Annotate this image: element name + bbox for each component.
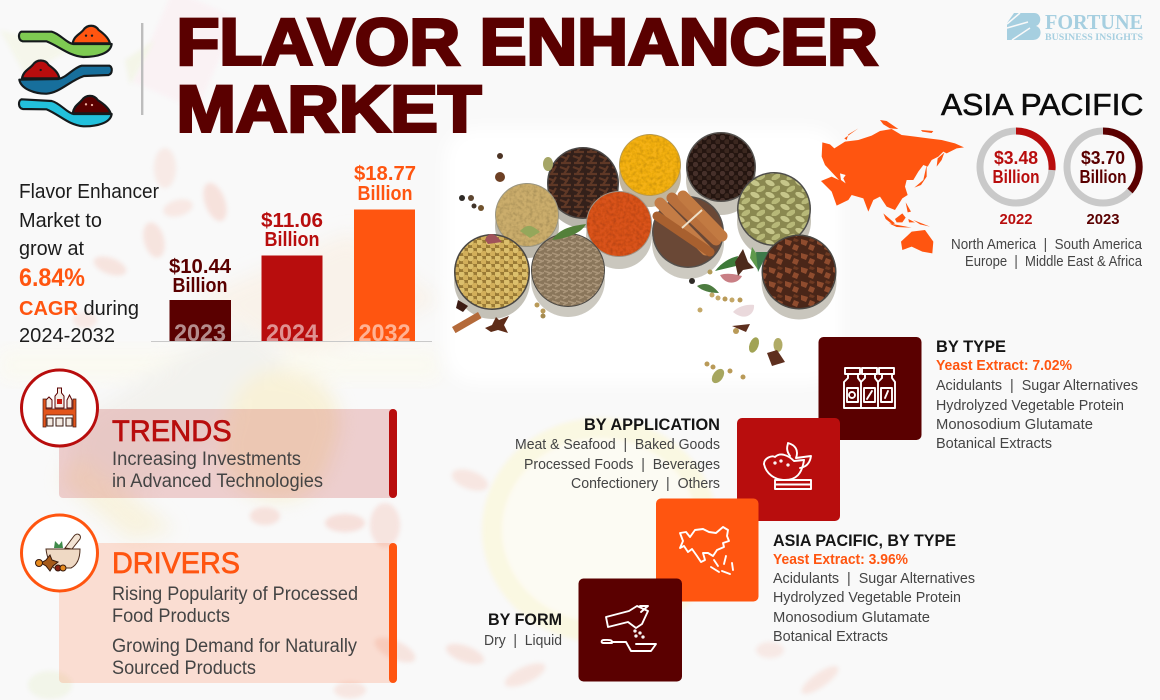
- text: market growth statement: Market to: [19, 210, 102, 232]
- text: Asia Pacific by type: Monosodium Glutamate: [773, 609, 930, 626]
- tile: by type bottles: [818, 337, 922, 440]
- text: market growth statement: grow at: [19, 238, 84, 260]
- text: drivers body: [112, 584, 358, 679]
- text: other regions: [951, 236, 1143, 270]
- text: by type: Yeast Extract: 7.02%: [936, 357, 1072, 374]
- donut: 2023 value: Billion: [1080, 167, 1126, 187]
- text: by type: [936, 337, 1138, 452]
- text: market growth statement: [19, 181, 159, 347]
- tile: by application bowl: [737, 418, 840, 521]
- bar: 2023: Billion: [172, 275, 228, 297]
- panel: trends: [22, 370, 397, 498]
- icon: spice bottles: [844, 368, 895, 408]
- bar: 2024: $11.06: [261, 210, 323, 232]
- text: by application: BY APPLICATION: [584, 415, 720, 434]
- text: trends body: in Advanced Technologies: [112, 471, 323, 492]
- bar: 2023: 2023: [174, 320, 226, 347]
- bar: 2032: $18.77: [354, 163, 416, 185]
- text: market growth statement: CAGR during: [19, 298, 139, 320]
- donut: 2022 value: $3.48: [994, 148, 1038, 168]
- donut: 2023 value: $3.70: [1081, 148, 1125, 168]
- text: by application: Confectionery | Others: [571, 475, 720, 492]
- panel: drivers: [22, 515, 397, 683]
- text: market growth statement: 2024-2032: [19, 325, 115, 347]
- text: market growth statement: 6.84%: [19, 264, 85, 292]
- spice bowl: cloves: [547, 147, 619, 228]
- loose spices and leaves: [452, 153, 785, 385]
- bar chart: market size: [151, 163, 432, 347]
- logo: Fortune Business Insights: FORTUNE: [1045, 10, 1143, 34]
- tile: by form cooking: [578, 578, 682, 682]
- donut: 2022 value: [980, 131, 1052, 228]
- icon: spice bowl and sticks: [764, 443, 811, 489]
- donut: 2022 value: Billion: [992, 167, 1040, 187]
- text: trends body: Increasing Investments: [112, 449, 301, 470]
- spoon: blue with red spice: [19, 60, 112, 94]
- text: Asia Pacific by type: Acidulants | Sugar Alternatives: [773, 570, 975, 587]
- tile: Asia Pacific map: [656, 498, 758, 602]
- spice bowl: turmeric: [619, 134, 681, 207]
- spoon: cyan with maroon spice: [19, 96, 112, 126]
- text: by form: Dry | Liquid: [484, 632, 562, 649]
- spice bowl: cumin: [531, 233, 605, 317]
- spice bowl: coriander seeds: [454, 234, 530, 319]
- text: by type: Monosodium Glutamate: [936, 416, 1093, 433]
- icon: spice rack: [22, 370, 98, 446]
- donut: 2023 value: [1067, 131, 1139, 228]
- bar: 2032: [354, 163, 416, 347]
- text: drivers body: Sourced Products: [112, 658, 256, 679]
- heading: trends: TRENDS: [112, 415, 232, 448]
- text: trends body: [112, 449, 323, 492]
- text: by type: Hydrolyzed Vegetable Protein: [936, 397, 1124, 414]
- bar: 2023: [169, 256, 232, 347]
- logo: Fortune Business Insights: [1007, 10, 1143, 43]
- text: by application: Meat & Seafood | Baked Goods: [515, 436, 720, 453]
- spice bowl: peppercorns: [686, 132, 756, 215]
- bar: 2023: $10.44: [169, 256, 232, 278]
- spice bowl: ground coriander: [495, 183, 559, 258]
- bar: 2032: 2032: [358, 320, 410, 347]
- text: Asia Pacific by type: Botanical Extracts: [773, 628, 888, 645]
- text: Asia Pacific by type: Hydrolyzed Vegetable Protein: [773, 589, 961, 606]
- heading: drivers: DRIVERS: [112, 546, 240, 580]
- text: by type: BY TYPE: [936, 337, 1006, 356]
- bar: 2024: [261, 210, 323, 347]
- spice bowl: cardamom: [737, 172, 811, 258]
- text: by form: BY FORM: [488, 610, 562, 629]
- title: [176, 5, 878, 146]
- title: MARKET: [176, 72, 481, 146]
- text: by form: [484, 610, 562, 649]
- map: Asia Pacific: [821, 120, 964, 253]
- text: drivers body: Food Products: [112, 606, 230, 627]
- spice bowl: dried bark: [762, 234, 836, 320]
- icon: three spice spoons: [19, 26, 112, 126]
- bar: 2024: Billion: [264, 229, 320, 251]
- text: drivers body: Growing Demand for Naturally: [112, 636, 357, 657]
- title: FLAVOR ENHANCER: [176, 5, 878, 79]
- text: Asia Pacific by type: ASIA PACIFIC, BY TYPE: [773, 531, 956, 550]
- bar: 2024: 2024: [266, 320, 319, 347]
- icon: seasoning a pan: [602, 606, 656, 651]
- bar: 2032: Billion: [358, 183, 412, 205]
- text: market growth statement: Flavor Enhancer: [19, 181, 159, 203]
- text: other regions: North America | South America: [951, 236, 1143, 253]
- icon: mortar and spices: [22, 515, 98, 591]
- text: by type: Acidulants | Sugar Alternatives: [936, 377, 1138, 394]
- icon: map outline: [680, 527, 733, 574]
- donut: 2022 value: 2022: [1000, 211, 1032, 228]
- text: by application: [515, 415, 720, 492]
- text: Asia Pacific by type: Yeast Extract: 3.96%: [773, 551, 908, 568]
- image: bowls of spices: [452, 132, 836, 385]
- logo: Fortune Business Insights: BUSINESS INSIGHTS: [1045, 33, 1143, 43]
- spoon: green with orange spice: [19, 26, 112, 57]
- text: drivers body: Rising Popularity of Processed: [112, 584, 358, 605]
- heading: Asia Pacific: ASIA PACIFIC: [941, 87, 1143, 122]
- text: by type: Botanical Extracts: [936, 435, 1052, 452]
- donut: 2023 value: 2023: [1086, 211, 1120, 228]
- text: by application: Processed Foods | Beverages: [524, 456, 720, 473]
- text: Asia Pacific by type: [773, 531, 975, 645]
- spice bowl: chili powder: [586, 191, 652, 269]
- spice bowl: cinnamon sticks: [652, 196, 724, 279]
